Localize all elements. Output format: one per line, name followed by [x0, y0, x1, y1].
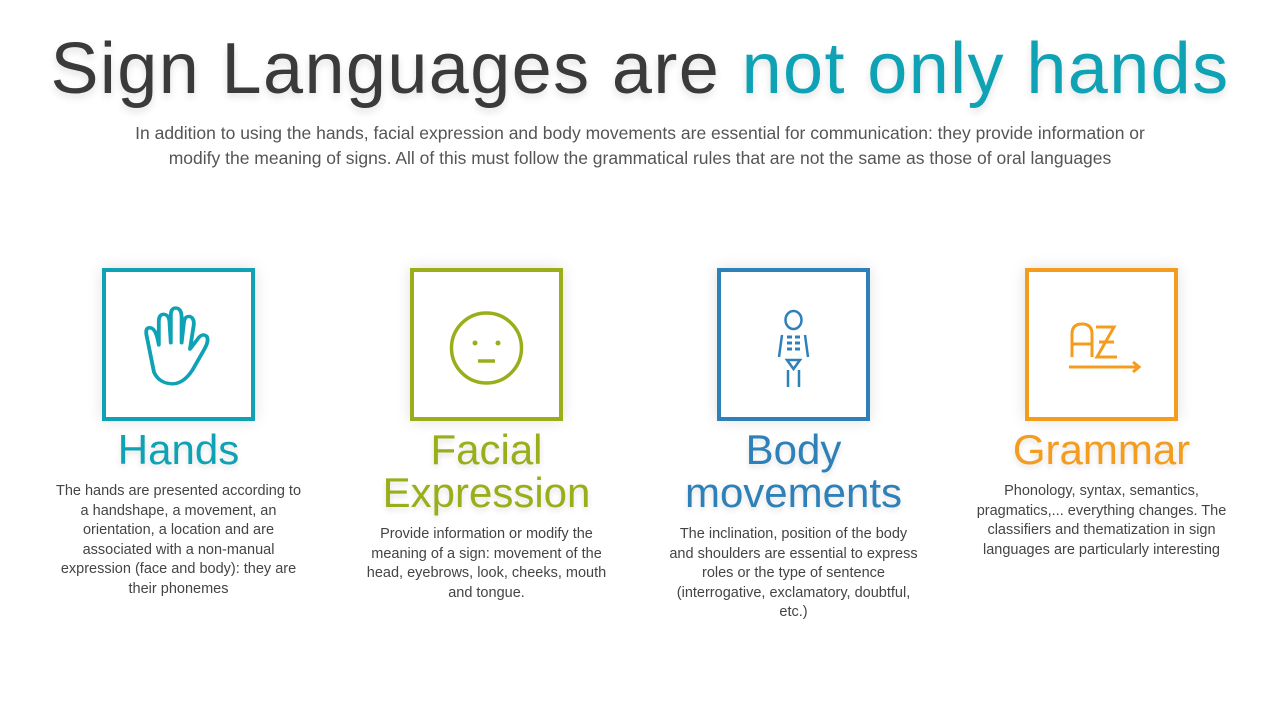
column: hands [56, 426, 301, 596]
icon box: facial [410, 268, 563, 421]
column: grammar: Phonology, syntax, semantics, pragmatics,... everything changes. The classifiers and thematization in sign languages are particularly interesting [977, 483, 1226, 558]
column: grammar: Grammar [1013, 426, 1190, 473]
column: hands: The hands are presented according to a handshape, a movement, an orientation, a location and are associated with a non-manual expression (face and body): they are their phonemes [56, 483, 301, 596]
subtitle: In addition to using the hands, facial expression and body movements are essential for communication: they provide information or modify the meaning of signs. All of this must follow the grammatical rules that are not the same as those of oral languages [135, 123, 1145, 168]
column: facial expression: Provide information or modify the meaning of a sign: movement of the head, eyebrows, look, cheeks, mouth and tongue. [367, 526, 606, 600]
icon box: hands [102, 268, 255, 421]
column: facial expression [367, 426, 606, 600]
column: facial expression: Expression [383, 469, 590, 516]
column: hands: Hands [118, 426, 239, 473]
icon box: body [717, 268, 870, 421]
column: facial expression: Facial [430, 426, 543, 473]
column: body movements: Body [746, 426, 841, 473]
column: body movements: movements [685, 469, 902, 516]
column: body movements [669, 426, 918, 620]
column: grammar [977, 426, 1226, 558]
title: Sign Languages are not only hands [50, 29, 1230, 109]
icon box: grammar [1025, 268, 1178, 421]
column: body movements: The inclination, position of the body and shoulders are essential to express roles or the type of sentence (interrogative, exclamatory, doubtful, etc.) [669, 526, 918, 620]
